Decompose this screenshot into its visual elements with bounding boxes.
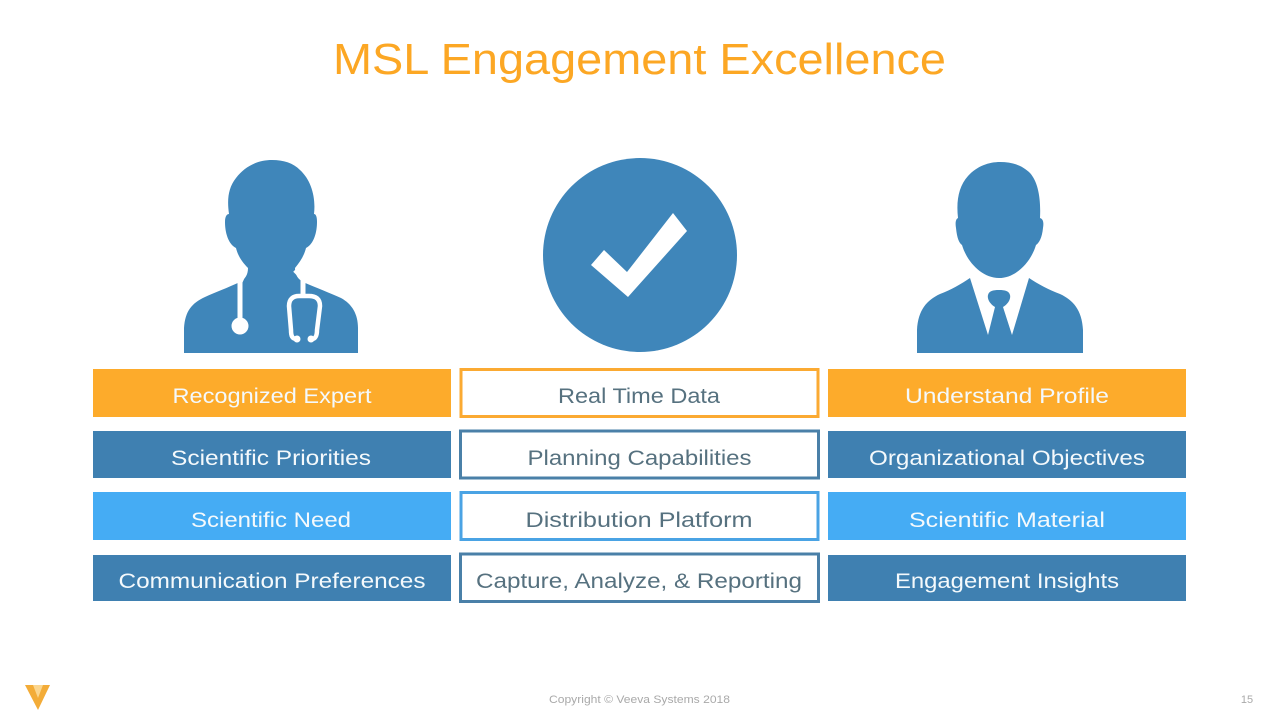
row: Organizational Objectives: Organizational Objectives [869,446,1145,470]
panel: right column [828,369,1186,601]
row: Real Time Data: Real Time Data [558,384,720,408]
row: Scientific Material: Scientific Material [909,508,1105,532]
row: Scientific Priorities: Scientific Priorities [171,446,371,470]
row: Scientific Need: Scientific Need [191,508,351,532]
row: Communication Preferences [93,555,451,601]
panel: left column [93,369,451,601]
row: Understand Profile [828,369,1186,417]
icon: Veeva logo [25,685,50,710]
icon: doctor with stethoscope [184,160,358,353]
panel: middle column [460,370,818,602]
row: Capture, Analyze, & Reporting [460,554,818,602]
row: Organizational Objectives [828,431,1186,478]
icon: check mark circle [543,158,737,352]
row: Distribution Platform [461,492,818,540]
row: Recognized Expert [93,369,451,417]
row: Planning Capabilities: Planning Capabilities [528,446,752,470]
row: Distribution Platform: Distribution Platform [526,508,752,532]
row: Scientific Priorities [93,431,451,478]
row: Capture, Analyze, & Reporting: Capture, Analyze, & Reporting [476,569,802,593]
page number: 15 [1241,694,1253,706]
row: Recognized Expert: Recognized Expert [172,384,372,408]
row: Scientific Need [93,492,451,540]
row: Understand Profile: Understand Profile [905,384,1109,408]
row: Engagement Insights [828,555,1186,601]
icon: businessman in suit [917,162,1083,353]
title: MSL Engagement Excellence [333,35,946,84]
row: Scientific Material [828,492,1186,540]
row: Communication Preferences: Communication Preferences [118,569,426,593]
row: Engagement Insights: Engagement Insights [895,569,1119,593]
footer copyright: Copyright © Veeva Systems 2018 [549,694,730,706]
row: Planning Capabilities [460,431,818,478]
row: Real Time Data [461,370,818,416]
